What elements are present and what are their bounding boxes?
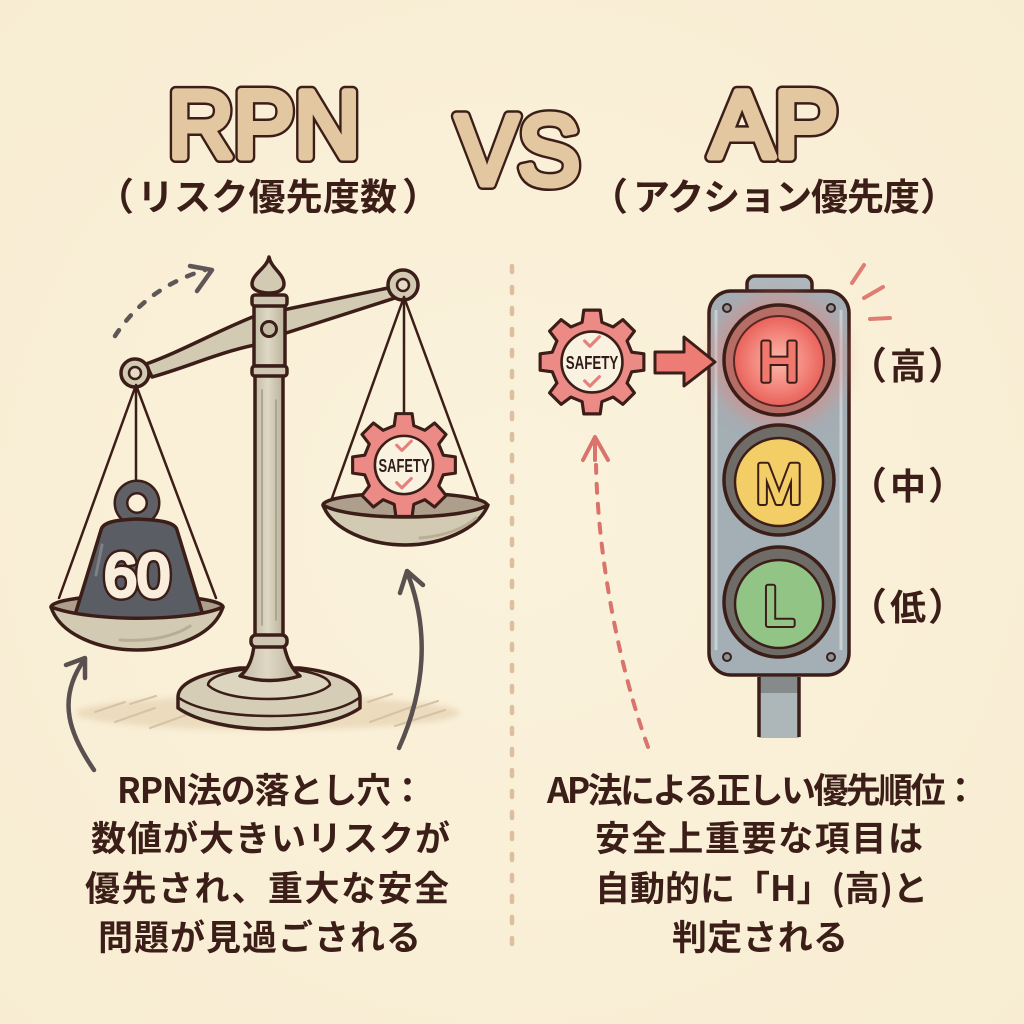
scale column head — [252, 257, 287, 376]
title: RPN: RPN — [168, 72, 360, 178]
label: high — [849, 335, 966, 390]
title: RPN: RPN — [168, 72, 360, 178]
label: high: 高 — [890, 338, 926, 390]
label: low — [849, 576, 966, 631]
red glow — [715, 296, 843, 424]
light H: H — [759, 330, 799, 393]
light M: M — [756, 452, 802, 515]
text block: RPN pitfall: RPN法の落とし穴： — [117, 763, 425, 814]
title: RPN subtitle: ） — [402, 166, 440, 221]
radiating lines — [852, 265, 890, 319]
ground shadow — [76, 694, 460, 730]
label: medium: （ — [849, 455, 887, 510]
arrow: dashed red arrow — [583, 437, 648, 747]
left pan strings — [59, 385, 216, 598]
light H — [724, 305, 834, 415]
scale base and post — [178, 375, 360, 729]
center divider — [510, 266, 514, 952]
weight 60 — [75, 487, 203, 619]
text block: AP priority — [546, 763, 978, 961]
gear: safety — [353, 414, 455, 516]
title: RPN subtitle: リスク優先度数 — [137, 167, 397, 221]
traffic light — [709, 276, 849, 738]
text block: RPN pitfall: 問題が見過ごされる — [98, 910, 421, 961]
gear: safety, right panel: SAFETY — [566, 353, 619, 374]
label: high: ） — [928, 335, 966, 390]
title: VS: VS — [456, 95, 580, 205]
title: AP subtitle: ） — [920, 166, 958, 221]
right pan with safety gear — [323, 297, 488, 545]
balance scale — [51, 257, 488, 730]
light H: H — [759, 330, 799, 393]
text block: RPN pitfall — [85, 763, 450, 961]
text block: RPN pitfall: 優先され、重大な安全 — [85, 861, 449, 912]
text block: AP priority: 判定される — [672, 910, 848, 961]
label: low: ） — [928, 576, 966, 631]
label: high: （ — [849, 335, 887, 390]
label: medium: 中 — [890, 458, 926, 510]
light M: M — [756, 452, 802, 515]
text block: AP priority: 自動的に「H」(高)と — [595, 861, 928, 912]
title: AP: AP — [710, 72, 838, 178]
title: AP subtitle: アクション優先度 — [633, 167, 920, 221]
screws — [723, 304, 835, 661]
label: medium — [849, 455, 966, 510]
title: AP subtitle: （ — [590, 166, 628, 221]
light M — [724, 425, 834, 535]
arrow: dashed tilt arrow — [115, 266, 212, 336]
light L: L — [763, 574, 795, 637]
title: AP: AP — [710, 72, 838, 178]
left pan with weight — [51, 385, 223, 650]
traffic light housing — [709, 291, 849, 675]
traffic light cap — [747, 276, 812, 300]
traffic light pole — [759, 670, 799, 738]
weight 60: 60 — [104, 542, 170, 609]
arrow: left pan up — [66, 658, 94, 770]
gear: safety: SAFETY — [379, 455, 430, 476]
label: low: 低 — [890, 579, 926, 631]
right pan strings — [332, 297, 478, 498]
light L — [724, 547, 834, 657]
label: medium: ） — [928, 455, 966, 510]
gear: safety, right panel — [540, 310, 644, 414]
title: VS: VS — [456, 95, 580, 205]
scale beam — [121, 270, 418, 387]
weight 60: 60 — [104, 542, 170, 609]
label: low: （ — [849, 576, 887, 631]
title: RPN subtitle: （ — [96, 166, 134, 221]
text block: AP priority: 安全上重要な項目は — [595, 811, 923, 862]
text block: RPN pitfall: 数値が大きいリスクが — [91, 811, 450, 862]
arrow: right pan up — [399, 571, 423, 748]
light L: L — [763, 574, 795, 637]
text block: AP priority: AP法による正しい優先順位： — [546, 763, 978, 814]
arrow: gear to H — [655, 337, 715, 386]
